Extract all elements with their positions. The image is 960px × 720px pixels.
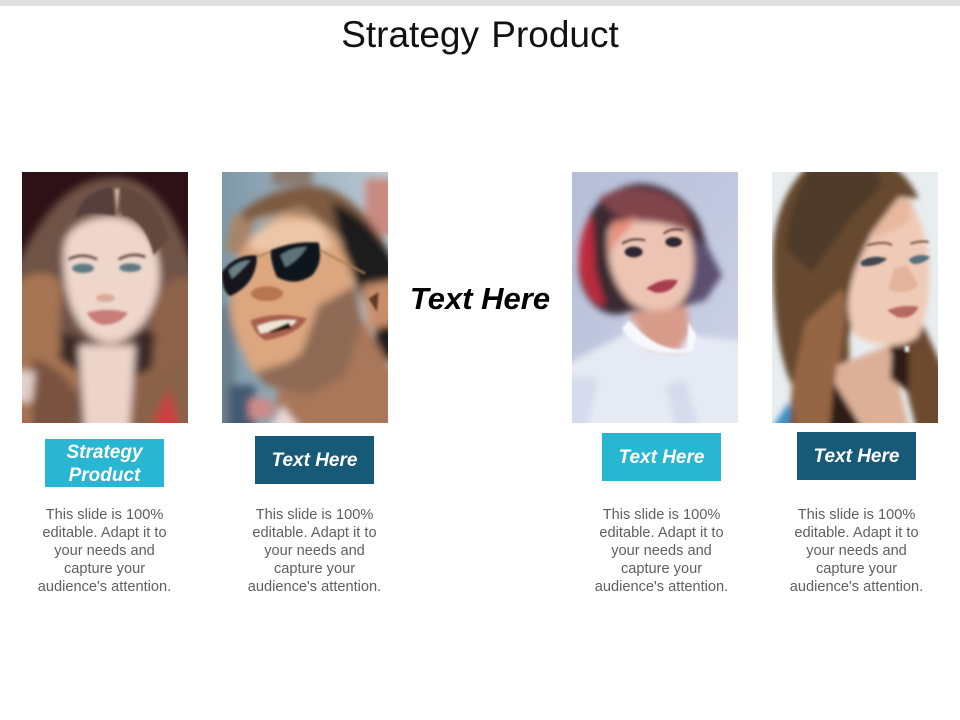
photo: woman with red-tinted bob [572,172,738,423]
description 2 [248,507,381,595]
label: text here navy left: Text Here [272,450,357,471]
description 3: This slide is 100% [603,507,720,523]
description 2: editable. Adapt it to [252,525,377,541]
photo: woman in profile with long brown hair [772,172,938,423]
description 1: your needs and [54,543,155,559]
description 1: capture your [64,561,145,577]
photo: smiling man with sunglasses [222,172,388,423]
description 4: audience's attention. [790,579,923,595]
description 3: audience's attention. [595,579,728,595]
label: text here navy right: Text Here [814,446,899,467]
label: strategy product: Product [69,464,140,486]
description 3: your needs and [611,543,712,559]
description 1: audience's attention. [38,579,171,595]
description 4: This slide is 100% [798,507,915,523]
label: text here cyan: Text Here [619,447,704,468]
description 4: your needs and [806,543,907,559]
description 3 [595,507,728,595]
label: text here navy right [797,432,916,480]
description 1: editable. Adapt it to [42,525,167,541]
description 3: editable. Adapt it to [599,525,724,541]
description 2: your needs and [264,543,365,559]
label: text here cyan [602,433,721,481]
label: strategy product: Strategy [66,442,143,462]
description 1: This slide is 100% [46,507,163,523]
callout text: Text Here [410,281,550,316]
top bar [0,0,960,6]
description 4: capture your [816,561,897,577]
label: strategy product [45,439,164,487]
description 4: editable. Adapt it to [794,525,919,541]
photo: woman with curly hair [22,172,188,423]
label: text here navy left [255,436,374,484]
title: Strategy Product [341,14,619,55]
description 2: capture your [274,561,355,577]
description 1 [38,507,171,595]
description 2: This slide is 100% [256,507,373,523]
description 2: audience's attention. [248,579,381,595]
description 3: capture your [621,561,702,577]
description 4 [790,507,923,595]
